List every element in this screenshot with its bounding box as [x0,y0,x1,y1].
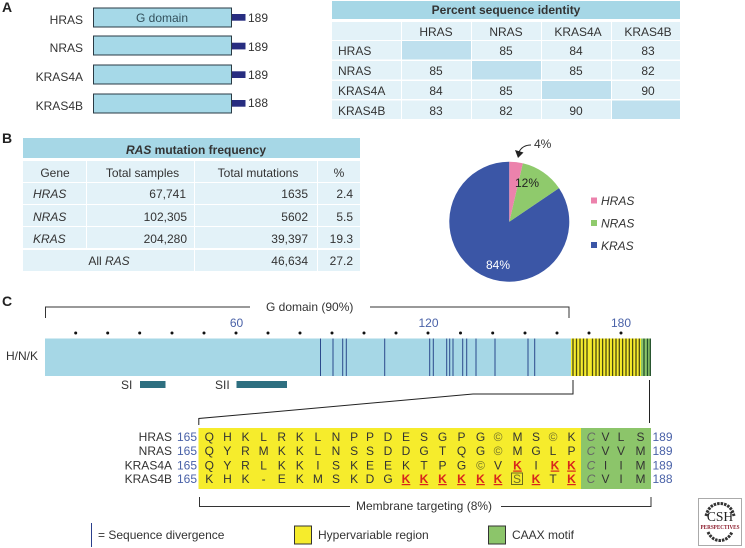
row KRAS4A: K [402,458,410,472]
row KRAS4B: M [636,472,646,486]
row HRAS: © [494,430,503,444]
row NRAS: M [512,444,522,458]
row NRAS: © [494,444,503,458]
row KRAS4A: I [316,458,320,472]
position numbers: 120 [418,316,439,330]
panel B [2,130,634,282]
row NRAS: Y [223,444,231,458]
row KRAS4B: K [296,472,304,486]
row HRAS: S [532,430,540,444]
table title [332,1,680,19]
table text: 39,397 [271,232,308,246]
12% label: 12% [515,176,539,190]
protein bar HRAS [50,8,268,27]
legend: hypervariable region: Hypervariable region [318,528,429,542]
row KRAS4A: Y [223,458,231,472]
row HRAS: P [350,430,358,444]
row KRAS4A: C [587,458,596,472]
table text: NRAS [33,210,66,224]
table text: HRAS [419,25,453,39]
legend: hypervariable region [294,526,429,544]
row KRAS4B: S [332,472,340,486]
table text: KRAS [33,232,66,246]
row KRAS4A: K [278,458,286,472]
table text: 27.2 [330,254,353,268]
protein bar NRAS: 189 [248,40,268,54]
switch II [215,378,287,392]
row NRAS: Q [205,444,214,458]
arrow to HRAS slice [515,145,531,158]
row KRAS4A: P [438,458,447,472]
sequence bar [45,338,651,376]
table text: 1635 [281,187,308,201]
table text: Total mutations [218,166,298,180]
row NRAS: 165 [177,444,197,458]
row HRAS: D [384,430,393,444]
row KRAS4B: K [457,472,466,486]
table text: KRAS4A [338,84,385,98]
row KRAS4A: L [260,458,267,472]
logo: CSH Perspectives [698,498,742,546]
row KRAS4A: V [494,458,502,472]
row HRAS: C [587,430,596,444]
row KRAS4B: T [549,472,557,486]
row HRAS: S [636,430,645,444]
position numbers [230,316,631,330]
membrane targeting bracket [200,497,651,513]
table text: 83 [641,44,655,58]
row KRAS4B: E [278,472,286,486]
table text: 83 [429,104,443,118]
legend KRAS: KRAS [601,239,634,253]
row HRAS: G [438,430,447,444]
row KRAS4B: KRAS4B [125,472,172,486]
table text: 82 [641,64,655,78]
row HRAS: 189 [652,430,673,444]
row HRAS: K [567,430,576,444]
legend: sequence divergence: = Sequence divergence [98,528,225,542]
H/N/K label: H/N/K [6,349,38,363]
table cells [332,22,680,119]
protein bar HRAS: 189 [248,11,268,25]
table text: 204,280 [144,232,187,246]
table text: HRAS [33,187,66,201]
row NRAS: NRAS [139,444,172,458]
row HRAS: E [402,430,410,444]
table cells [23,161,360,271]
row KRAS4A: E [384,458,392,472]
table text: 85 [569,64,583,78]
row KRAS4B: K [420,472,429,486]
G domain bracket: G domain (90%) [266,300,353,314]
row KRAS4B: K [532,472,541,486]
legend: sequence divergence [92,523,225,547]
table text [33,166,353,268]
protein bar NRAS: NRAS [50,41,83,55]
row HRAS: L [315,430,322,444]
table text: All RAS [88,254,130,268]
row NRAS: V [601,444,610,458]
row KRAS4A: R [241,458,250,472]
table: percent sequence identity [332,1,680,119]
row NRAS: T [439,444,447,458]
legend: CAAX motif [488,526,575,544]
row KRAS4A: T [420,458,428,472]
row KRAS4B: K [438,472,447,486]
row NRAS: M [636,444,646,458]
row KRAS4B: M [313,472,323,486]
row KRAS4A: M [636,458,646,472]
table text: NRAS [338,64,371,78]
row HRAS: P [366,430,374,444]
table text: 2.4 [336,187,353,201]
row NRAS: G [531,444,541,458]
row NRAS: C [587,444,596,458]
table text: HRAS [338,44,371,58]
position numbers: 60 [230,316,243,330]
row HRAS: S [420,430,428,444]
row HRAS: 165 [177,430,197,444]
panel C [2,293,673,513]
row NRAS [139,444,673,458]
row NRAS: V [617,444,625,458]
row KRAS4A: K [567,458,576,472]
84% label: 84% [486,258,510,272]
legend HRAS: HRAS [601,194,634,208]
legend: CAAX motif: CAAX motif [512,528,575,542]
row HRAS: M [512,430,522,444]
protein bar KRAS4A: KRAS4A [36,70,83,84]
row KRAS4B: H [223,472,232,486]
position numbers: 180 [611,316,631,330]
row KRAS4B: G [383,472,393,486]
table text: KRAS4B [338,104,385,118]
row KRAS4A: KRAS4A [125,458,172,472]
row KRAS4A: I [604,458,607,472]
row KRAS4B: C [587,472,596,486]
row HRAS: © [549,430,558,444]
row KRAS4B: K [567,472,576,486]
row KRAS4A: G [457,458,466,472]
row KRAS4B: K [350,472,358,486]
row NRAS: S [350,444,358,458]
table text: 67,741 [149,187,186,201]
table text: KRAS4B [624,25,672,39]
protein bar HRAS: G domain [136,11,188,25]
table text: 85 [499,44,513,58]
row HRAS: G [476,430,485,444]
protein bar KRAS4A: 189 [248,68,268,82]
switch I [121,378,166,392]
slice: NRAS [509,163,559,222]
table text: 102,305 [144,210,187,224]
row NRAS: D [384,444,393,458]
legend [92,523,575,547]
row KRAS4B: 165 [177,472,197,486]
hypervariable sequence box [198,428,581,489]
row NRAS: P [567,444,576,458]
row NRAS: K [278,444,286,458]
table text [338,25,672,118]
protein bar KRAS4A [36,65,268,84]
table text: 90 [569,104,583,118]
row KRAS4A: 189 [652,458,673,472]
row HRAS [139,430,673,444]
slice: KRAS [449,162,569,282]
row KRAS4B: D [366,472,375,486]
row NRAS: G [419,444,429,458]
G domain bracket [46,300,569,318]
row NRAS: N [332,444,340,458]
row NRAS: S [366,444,374,458]
row KRAS4A: 165 [177,458,197,472]
row KRAS4A: S [332,458,340,472]
row KRAS4B: I [619,472,623,486]
table text: KRAS4A [554,25,602,39]
protein bar KRAS4B: 188 [248,96,268,110]
table text: 90 [641,84,655,98]
row NRAS: K [296,444,304,458]
row KRAS4B: 188 [652,472,673,486]
membrane targeting bracket: Membrane targeting (8%) [356,499,492,513]
table text: 5602 [281,210,308,224]
row NRAS: Q [457,444,466,458]
row KRAS4A: K [296,458,304,472]
row NRAS: L [550,444,557,458]
row HRAS: P [457,430,466,444]
row HRAS: K [296,430,304,444]
row KRAS4B: K [241,472,250,486]
table title: Percent sequence identity [432,3,581,17]
CAAX sequence box [581,428,651,489]
table text: 46,634 [271,254,308,268]
protein bar KRAS4B [36,94,268,113]
row KRAS4B: K [476,472,485,486]
row HRAS: HRAS [139,430,172,444]
4% label: 4% [534,137,552,151]
table text: 85 [499,84,513,98]
row HRAS: N [332,430,340,444]
protein bar HRAS: HRAS [50,13,83,27]
row KRAS4B: S [513,472,521,486]
pie chart [449,137,569,282]
position dots [74,332,622,334]
protein bar KRAS4B: KRAS4B [36,99,83,113]
row KRAS4A: K [551,458,560,472]
table text: Total samples [106,166,179,180]
table text: Gene [40,166,70,180]
table text: NRAS [489,25,523,39]
row HRAS: L [260,430,267,444]
row NRAS: D [402,444,411,458]
table text: 85 [429,64,443,78]
row KRAS4A: K [513,458,522,472]
row KRAS4A: Q [205,458,214,472]
table title [23,138,360,158]
pie legend [591,194,634,253]
legend NRAS: NRAS [601,216,634,230]
row KRAS4B: K [494,472,503,486]
panel A: G domain schematic [2,0,268,113]
table: RAS mutation frequency [23,138,360,271]
logo: CSH Perspectives: PERSPECTIVES [700,525,740,531]
row HRAS: K [241,430,250,444]
table text: 84 [569,44,583,58]
row KRAS4B [125,472,673,486]
slice: HRAS [509,162,523,222]
row KRAS4A: K [350,458,358,472]
row NRAS: L [315,444,322,458]
row HRAS: H [223,430,232,444]
zoom lines [199,380,650,425]
row KRAS4A: © [476,458,485,472]
label C: C [2,293,12,309]
switch I: SI [121,378,132,392]
table text: 82 [499,104,513,118]
switch II: SII [215,378,230,392]
table text: 19.3 [330,232,353,246]
row KRAS4A: I [534,458,538,472]
label B: B [2,130,12,146]
row KRAS4A: I [619,458,623,472]
row KRAS4B: - [262,472,266,486]
row NRAS: R [241,444,250,458]
row KRAS4B: K [402,472,411,486]
row NRAS: 189 [652,444,673,458]
row HRAS: R [277,430,286,444]
row KRAS4A: E [366,458,374,472]
row NRAS: G [476,444,485,458]
row KRAS4B: V [601,472,610,486]
logo: CSH Perspectives: CSH [707,509,733,524]
row KRAS4B: K [205,472,213,486]
protein bar NRAS [50,36,268,55]
table text: 5.5 [336,210,353,224]
table title: RAS mutation frequency [126,143,266,157]
row NRAS: M [259,444,269,458]
table text: 84 [429,84,443,98]
row HRAS: V [601,430,610,444]
table text: % [334,166,345,180]
row KRAS4A [125,458,673,472]
row HRAS: L [618,430,625,444]
row HRAS: Q [205,430,214,444]
